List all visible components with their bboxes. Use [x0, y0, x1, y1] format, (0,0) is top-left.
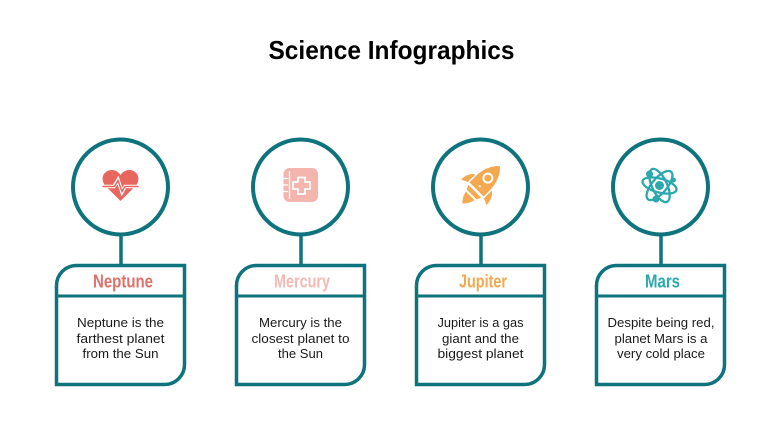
text: Mars description: very cold place — [617, 346, 705, 361]
connector: Mercury — [299, 235, 303, 265]
text: Mercury description: closest planet to — [252, 331, 350, 346]
connector: Neptune — [119, 235, 123, 265]
text: Mars description: planet Mars is a — [614, 331, 708, 346]
card: Neptune — [56, 266, 185, 384]
heading: Jupiter: Jupiter — [459, 272, 507, 292]
text: Neptune description — [76, 315, 165, 361]
icon: medical notebook — [283, 168, 318, 202]
panel: Neptune — [56, 140, 185, 384]
text: Mercury description: the Sun — [278, 346, 323, 361]
text: Mercury description: Mercury is the — [259, 315, 342, 330]
text: Jupiter description: biggest planet — [438, 346, 524, 361]
card divider — [596, 294, 725, 298]
heading: Mars: Mars — [645, 272, 680, 292]
panel: Mars — [596, 140, 725, 384]
card: Mercury — [236, 266, 365, 384]
circle: Neptune — [73, 140, 168, 234]
circle: Jupiter — [433, 140, 528, 234]
icon: heart with pulse — [102, 170, 139, 201]
panel: Mercury — [236, 140, 365, 384]
text: Neptune description: farthest planet — [76, 331, 165, 346]
panel: Jupiter — [416, 140, 545, 384]
card: Mars — [596, 266, 725, 384]
text: Mercury description — [252, 315, 350, 361]
icon: rocket — [450, 153, 513, 216]
text: Jupiter description: Jupiter is a gas — [438, 315, 524, 330]
circle: Mercury — [253, 140, 348, 234]
card divider — [56, 294, 185, 298]
text: Neptune description: Neptune is the — [77, 315, 164, 330]
text: Mars description — [608, 315, 714, 361]
card divider — [416, 294, 545, 298]
heading: Neptune: Neptune — [93, 272, 153, 292]
text: Mars description: Despite being red, — [608, 315, 714, 330]
heading: Mercury: Mercury — [274, 272, 330, 292]
icon: atom — [641, 166, 678, 205]
text: Jupiter description: giant and the — [442, 331, 519, 346]
card divider — [236, 294, 365, 298]
title: Science Infographics — [268, 35, 514, 65]
circle: Mars — [613, 140, 708, 234]
connector: Mars — [659, 235, 663, 265]
connector: Jupiter — [479, 235, 483, 265]
card: Jupiter — [416, 266, 545, 384]
text: Neptune description: from the Sun — [82, 346, 158, 361]
text: Jupiter description — [438, 315, 524, 361]
